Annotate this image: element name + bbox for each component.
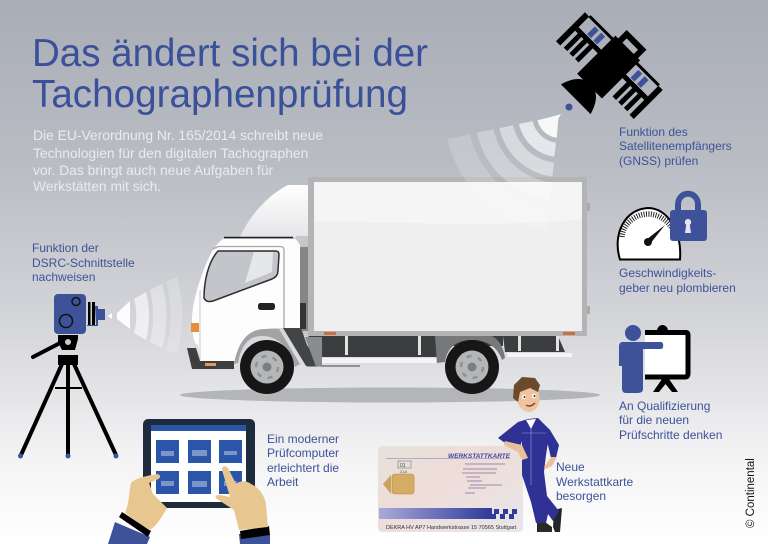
icon: presenter at board <box>619 325 688 393</box>
right arm <box>538 420 559 458</box>
cab body <box>192 239 300 361</box>
antenna bracket <box>617 30 646 59</box>
icon: satellite <box>537 0 675 138</box>
intro text: Technologien für den digitalen Tachographen <box>33 145 308 161</box>
label: DSRC <box>32 241 135 284</box>
label: Qualifizierung: An Qualifizierung <box>619 399 710 413</box>
shoes <box>537 522 552 532</box>
truck <box>187 177 590 394</box>
label: DSRC: nachweisen <box>32 270 95 284</box>
label: Werkstattkarte: besorgen <box>556 489 606 503</box>
intro text: Werkstätten mit sich. <box>33 178 161 194</box>
satellite body <box>577 36 640 99</box>
mechanic <box>498 377 562 532</box>
rear wheel <box>445 340 499 394</box>
ground shadow <box>180 388 600 402</box>
label: Geschwindigkeitsgeber: geber neu plombieren <box>619 281 736 295</box>
DSRC signal waves <box>108 277 182 354</box>
intro text: vor. Das bringt auch neue Aufgaben für <box>33 162 274 178</box>
label: GNSS: (GNSS) prüfen <box>619 154 698 168</box>
label: Prüfcomputer <box>267 432 339 489</box>
upper wing <box>556 11 615 70</box>
label: Geschwindigkeitsgeber: Geschwindigkeits- <box>619 266 716 280</box>
wheel arch <box>234 329 300 367</box>
chassis rails <box>308 336 565 357</box>
left arm <box>498 422 523 447</box>
rear mudguard <box>435 336 505 363</box>
icon: DSRC camera on tripod <box>18 294 118 458</box>
window <box>204 251 279 302</box>
cargo box <box>308 177 587 336</box>
workshop card: DEKRA HV AP7 Handwerkstrasse 15 70565 Stuttgart <box>386 525 517 531</box>
hand: left <box>108 474 167 544</box>
signal dot <box>566 104 572 110</box>
intro text: Die EU-Verordnung Nr. 165/2014 schreibt neue <box>33 127 323 143</box>
label: Geschwindigkeitsgeber <box>619 266 736 295</box>
label: Werkstattkarte: Neue <box>556 460 585 474</box>
cab roof spoiler <box>240 185 309 238</box>
head <box>515 381 541 413</box>
label: Prüfcomputer: Arbeit <box>267 475 299 489</box>
label: GNSS <box>619 125 732 168</box>
workshop card: 01 <box>400 463 406 469</box>
label: Qualifizierung: Prüfschritte denken <box>619 428 722 442</box>
headlight <box>191 323 199 332</box>
label: Werkstattkarte <box>556 460 633 503</box>
door handle <box>258 303 275 310</box>
icon: speedometer and padlock <box>618 194 707 260</box>
cab rear panel <box>296 236 310 336</box>
workshop card: 21A <box>400 469 407 474</box>
tablet <box>143 419 255 508</box>
label: Werkstattkarte: Werkstattkarte <box>556 475 633 489</box>
title <box>32 32 428 116</box>
label: Prüfcomputer: Prüfcomputer <box>267 446 339 460</box>
label: GNSS: Funktion des <box>619 125 688 139</box>
label: DSRC: DSRC-Schnittstelle <box>32 256 135 270</box>
bumper <box>187 348 234 369</box>
label: GNSS: Satellitenempfängers <box>619 139 732 153</box>
satellite signal waves <box>448 115 559 229</box>
collar <box>526 419 536 429</box>
label: Prüfcomputer: Ein moderner <box>267 432 339 446</box>
lower wing <box>606 61 664 119</box>
signal tip <box>556 114 561 119</box>
title: Das ändert sich bei der <box>32 32 428 75</box>
title: Tachographenprüfung <box>32 73 408 116</box>
hand: right <box>216 466 270 544</box>
overalls <box>518 418 559 523</box>
workshop card <box>378 446 523 532</box>
label: Prüfcomputer: erleichtert die <box>267 461 339 475</box>
front wheel <box>240 340 294 394</box>
dish <box>561 70 605 114</box>
label: Qualifizierung <box>619 399 722 442</box>
workshop card: WERKSTATTKARTE <box>448 453 511 460</box>
label: DSRC: Funktion der <box>32 241 99 255</box>
label: Qualifizierung: für die neuen <box>619 413 689 427</box>
copyright: © Continental <box>745 458 757 528</box>
intro text <box>33 127 323 194</box>
